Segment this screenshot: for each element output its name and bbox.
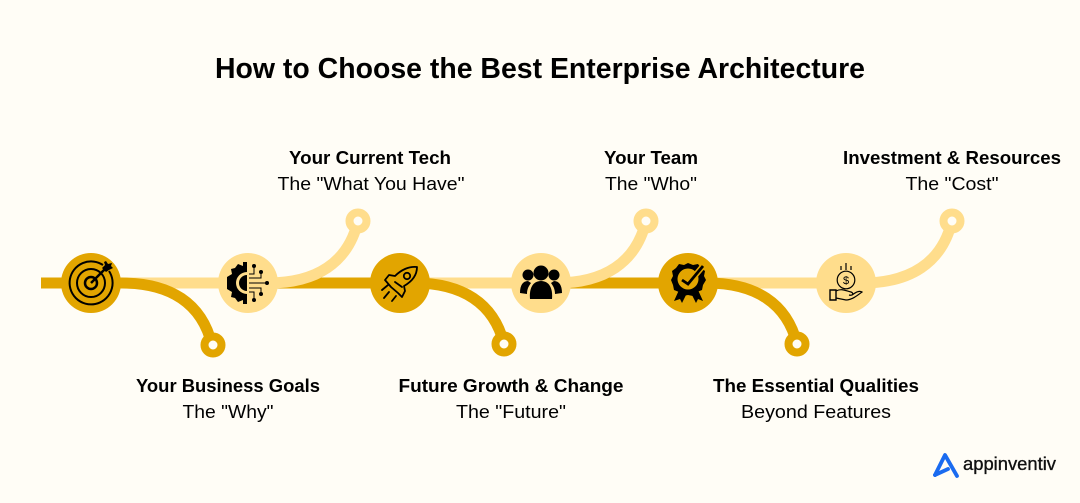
- label: future growth and change: [398, 376, 624, 422]
- end node: business goals: [204, 336, 222, 354]
- label: the essential qualities: The Essential Qualities: [713, 376, 919, 396]
- icon: money in hand: [816, 253, 876, 313]
- icon: target: [61, 253, 121, 313]
- label: investment and resources: The "Cost": [906, 174, 998, 194]
- icon: money in hand: $: [843, 275, 849, 287]
- label: your current tech: [278, 148, 464, 194]
- end node: investment: [944, 212, 960, 230]
- label: your team: Your Team: [604, 148, 698, 168]
- logo: appinventiv: [935, 454, 1056, 476]
- title: How to Choose the Best Enterprise Architecture: [215, 53, 865, 85]
- label: future growth and change: The "Future": [456, 402, 566, 422]
- end node: future growth: [496, 336, 512, 352]
- end node: current tech: [350, 212, 366, 230]
- label: your business goals: The "Why": [182, 402, 274, 422]
- label: investment and resources: [843, 148, 1061, 194]
- timeline connectors: [41, 221, 952, 345]
- label: your current tech: The "What You Have": [278, 174, 464, 194]
- icon: team: [511, 253, 571, 313]
- label: investment and resources: Investment & Resources: [843, 148, 1061, 168]
- label: the essential qualities: Beyond Features: [741, 402, 891, 422]
- icon: rocket: [370, 253, 430, 313]
- label: future growth and change: Future Growth & Change: [398, 376, 624, 396]
- icon: quality badge: [658, 253, 718, 313]
- end node: team: [638, 212, 654, 230]
- end node: essential qualities: [788, 336, 806, 352]
- label: your current tech: Your Current Tech: [289, 148, 451, 168]
- label: the essential qualities: [713, 376, 919, 422]
- logo: appinventiv: appinventiv: [963, 454, 1056, 474]
- icon: gear and circuit: [218, 253, 278, 313]
- label: your business goals: Your Business Goals: [136, 376, 320, 396]
- label: your team: [604, 148, 698, 194]
- label: your team: The "Who": [605, 174, 697, 194]
- label: your business goals: [136, 376, 320, 422]
